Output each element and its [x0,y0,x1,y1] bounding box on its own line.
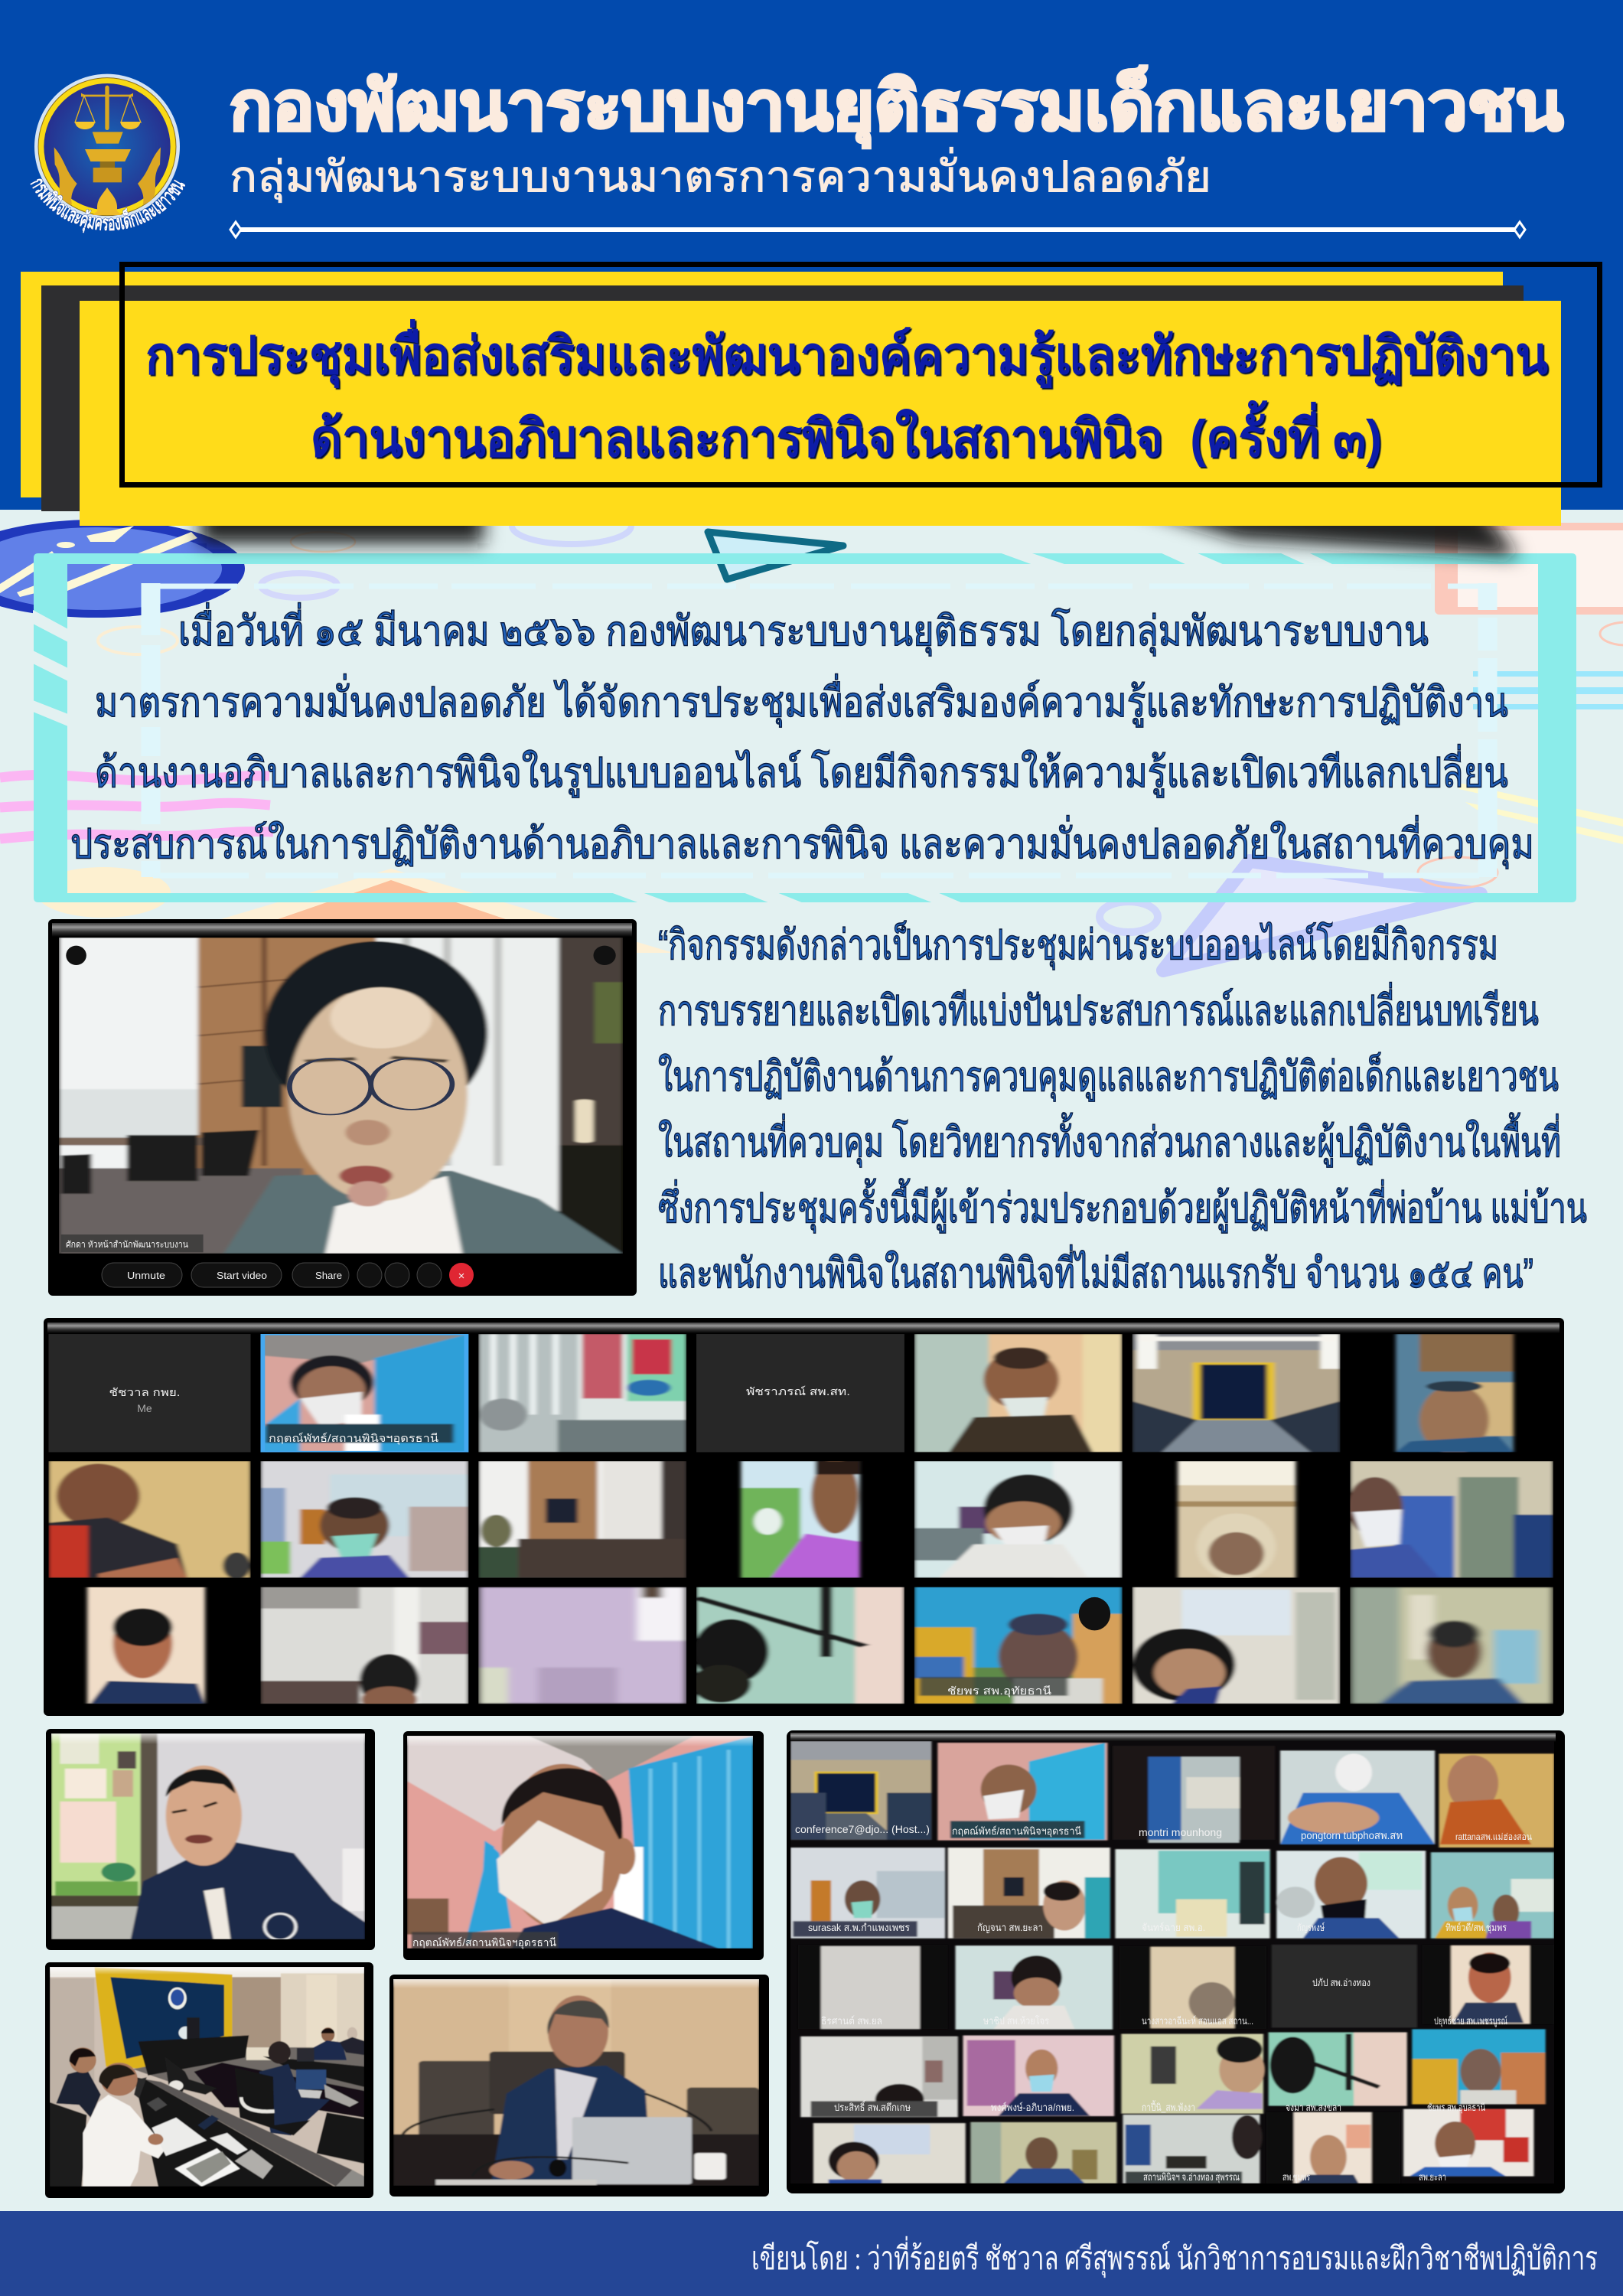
tile name labels: ชัยพร สพ.อุทัยธานี [947,1684,1052,1698]
speaker name tag: ศักดา หัวหน้าสำนักพัฒนาระบบงาน [66,1239,188,1250]
screen participant labels: ธิรศานต์ สพ.ยล [821,2015,882,2027]
screen participant labels: กาปี้นิ_สพ.พังงา [1142,2100,1195,2113]
screen participant labels: ษาชิป สพ.ห้วยโจร [983,2015,1049,2027]
intro paragraph [70,602,1534,869]
screen participant labels: conference7@djo... (Host...) [795,1823,930,1835]
screen participant labels: montri mounhong [1139,1826,1222,1838]
meeting control bar: Start video [217,1270,267,1281]
screen participant labels: จงมา สพ.สงขลา [1286,2102,1341,2113]
teal text frame [34,553,1576,902]
screen participant labels: สพ.ชุมพร [1282,2171,1310,2183]
header title: กองพัฒนาระบบงานยุติธรรมเด็กและเยาวชน [230,65,1563,148]
screen participant labels: กัญรพงษ์ [1297,1922,1325,1933]
photo: screen of video call grid [787,1730,1565,2193]
row 2 tiles [790,1848,1554,1939]
row 3 tiles [798,1945,1554,2030]
screen participant labels: พงศ์พงษ์-อภิบาล/กพย. [991,2102,1074,2113]
screen participant labels: ปภัป สพ.อ่างทอง [1312,1977,1370,1988]
screen participant labels: ประสิทธิ์ สพ.สตึกเกษ [834,2100,911,2113]
logo: department seal [30,73,185,233]
seal caption: กรมพินิจและคุ้มครองเด็กและเยาวชน [30,179,185,233]
tile name labels: ชัชวาล กพย. [109,1386,181,1398]
row 4 tiles [800,2029,1546,2117]
screen participant labels: pongtorn tubphoสพ.สท [1301,1829,1403,1841]
screen participant labels: ชัยพร สพ.อุบลธานี [1427,2102,1485,2114]
screen participant labels: นางสาวอาฉีนะห์ สอนแอส สถาน... [1142,2015,1253,2027]
header band [0,0,1623,510]
screen participant labels: ทิพย์วดี/สพ.ชุมพร [1445,1922,1507,1934]
header subtitle: กลุ่มพัฒนาระบบงานมาตรการความมั่นคงปลอดภัย [230,147,1211,203]
meeting control bar: × [458,1270,464,1283]
meeting control bar: Share [315,1270,342,1281]
screen participant labels [795,1823,1532,2183]
meeting control bar: Unmute [127,1270,165,1281]
photo: official at laptop [389,1975,769,2197]
main title [145,318,1548,468]
screen participant labels: กัญจนา สพ.ยะลา [977,1922,1043,1933]
photo: presenter at desk with bulletin board [46,1729,375,1950]
screen participant labels: จันทร์ฉาย สพ.อ. [1142,1922,1205,1933]
main title: การประชุมเพื่อส่งเสริมและพัฒนาองค์ความรู้และทักษะการปฏิบัติงาน [145,318,1548,389]
photo: meeting room with officials [45,1962,373,2198]
divider with diamonds [230,222,1525,237]
screen participant labels: ปยุทธ์ชาย สพ.เพชรบูรณ์ [1434,2015,1507,2027]
tile name labels: พัชราภรณ์ สพ.สท. [746,1385,850,1397]
screen participant labels: สพ.ยะลา [1419,2171,1446,2183]
participant name tag: กฤตณ์พัทธ์/สถานพินิจฯอุดรธานี [412,1936,556,1949]
photo: speaker video call [48,919,637,1296]
photo: 21-person video call grid [44,1318,1564,1716]
intro paragraph: เมื่อวันที่ ๑๕ มีนาคม ๒๕๖๖ กองพัฒนาระบบงานยุติธรรม โดยกลุ่มพัฒนาระบบงาน [178,602,1429,657]
row 5 tiles [813,2109,1533,2183]
quote paragraph [658,921,1587,1296]
main title: ด้านงานอภิบาลและการพินิจในสถานพินิจ (ครั้งที่ ๓) [311,400,1382,468]
screen participant labels: กฤตณ์พัทธ์/สถานพินิจฯอุดรธานี [952,1825,1081,1838]
photo: masked participant [403,1731,764,1960]
tile row 2 [48,1459,1553,1580]
row 1 tiles [790,1741,1554,1848]
tile row 1 [48,1334,1553,1455]
screen participant labels: rattanaสพ.แม่ฮ่องสอน [1455,1831,1532,1842]
tile row 3 [48,1587,1553,1713]
tile name labels: Me [137,1402,152,1414]
footer band [0,2211,1623,2296]
meeting control bar [102,1263,474,1287]
screen participant labels: surasak ส.พ.กำแพงเพชร [808,1922,910,1933]
tile name labels [109,1385,1052,1698]
decorative background shapes [0,507,1623,970]
screen participant labels: สถานพินิจฯ จ.อ่างทอง สุพรรณ [1143,2171,1240,2183]
layered title panel [21,265,1599,526]
shadow beneath title panel [200,497,1519,557]
tile name labels: กฤตณ์พัทธ์/สถานพินิจฯอุดรธานี [269,1432,438,1445]
